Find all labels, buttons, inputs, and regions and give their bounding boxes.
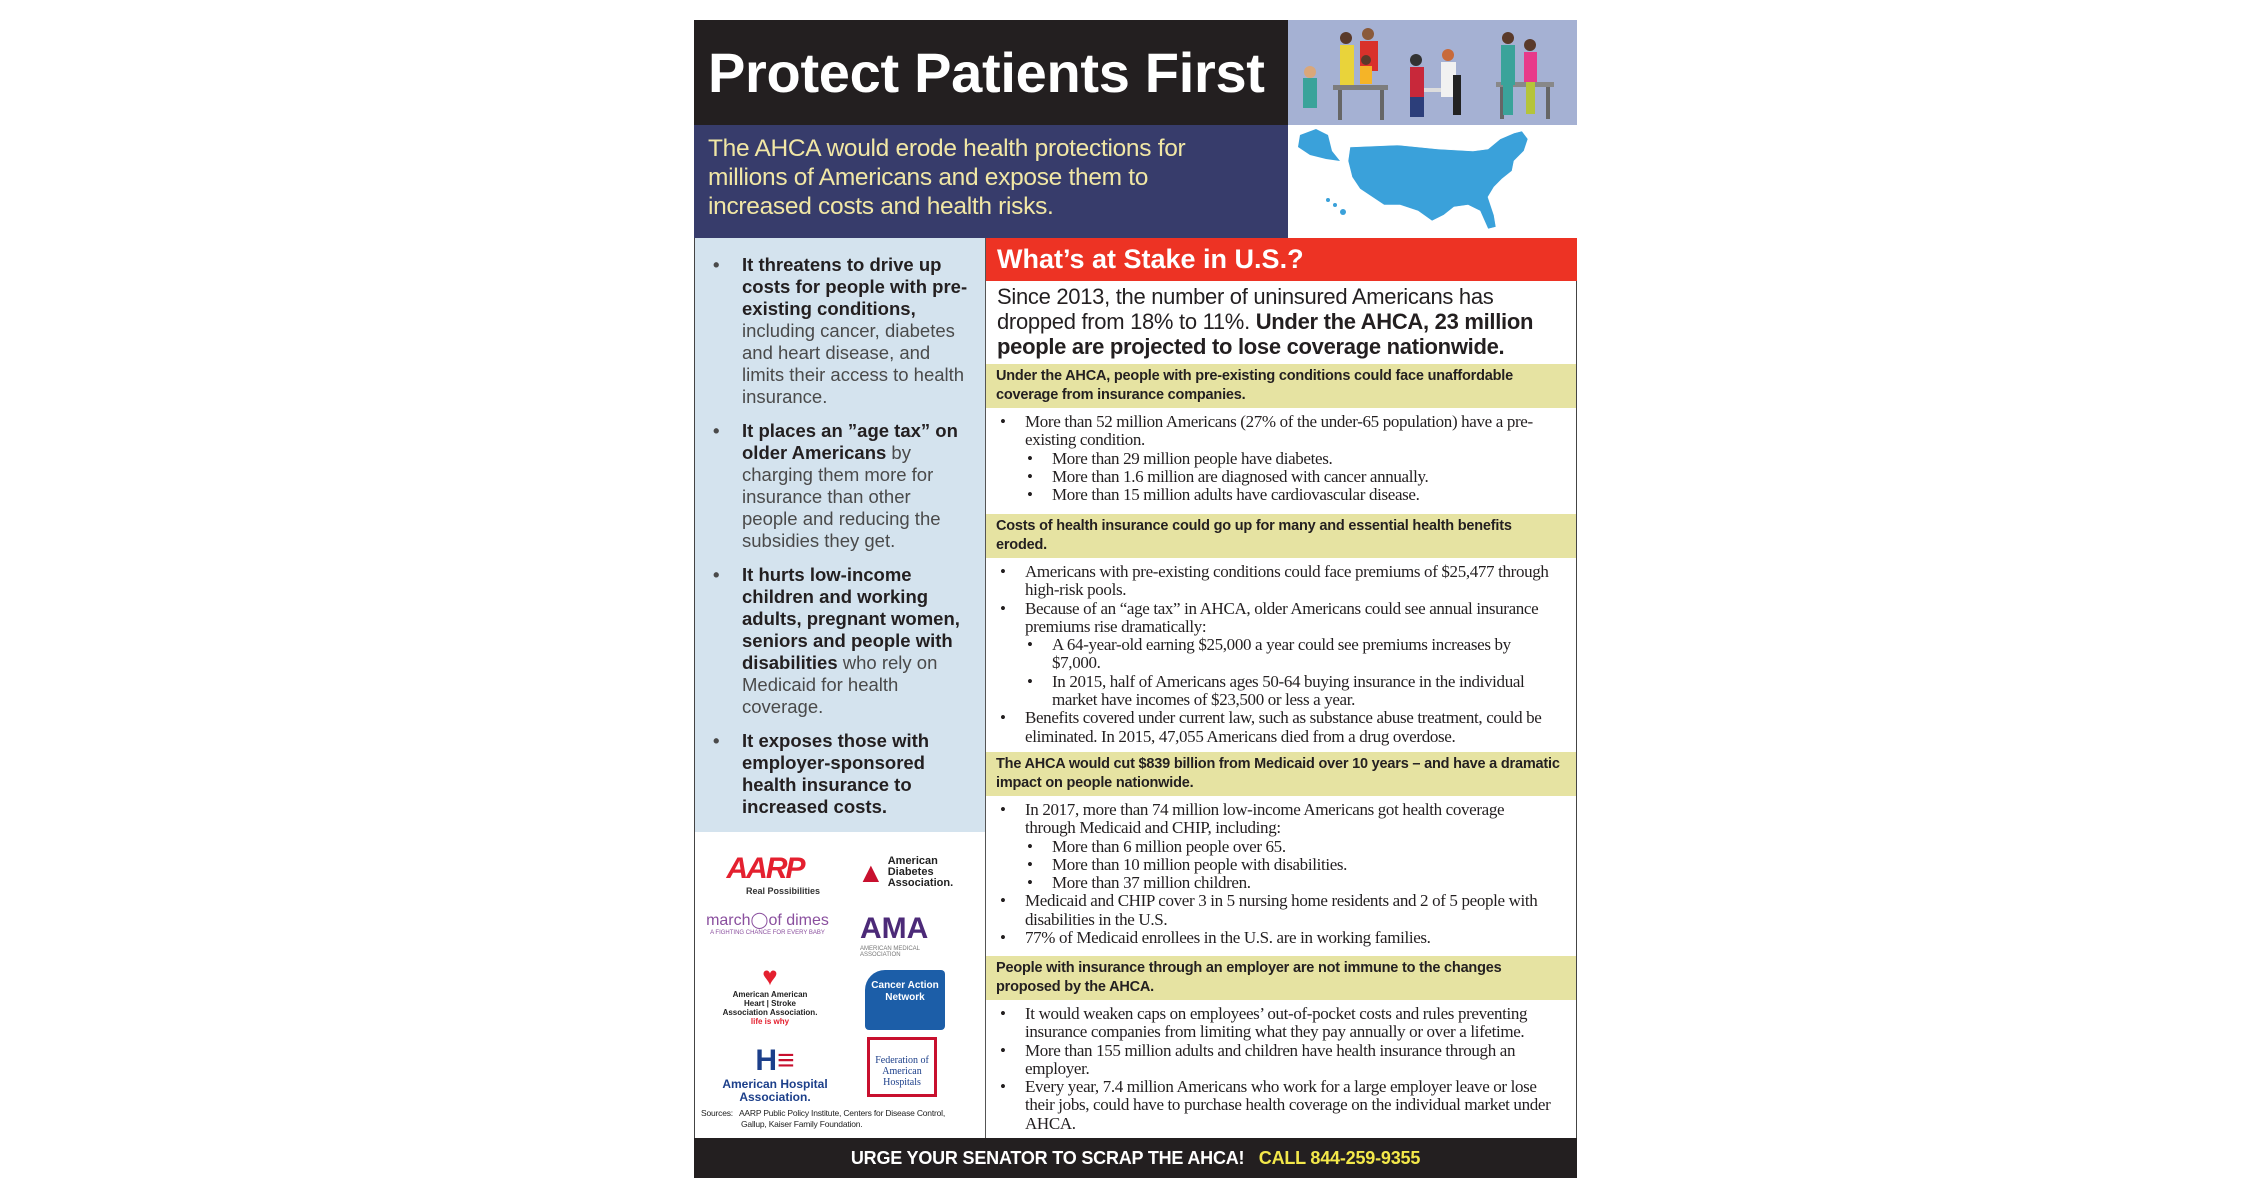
section 4: employer insurance: People with insurance through an employer are not immune to the changes proposed by the AHCA.: [996, 960, 1501, 995]
section 1: pre-existing conditions: More than 29 million people have diabetes.: [1052, 449, 1332, 468]
sources: [701, 1108, 945, 1129]
section 3: Medicaid: [986, 752, 1576, 947]
logo: AMA: AMERICAN MEDICAL ASSOCIATION: [860, 946, 920, 958]
section 3: Medicaid: In 2017, more than 74 million low-income Americans got health coverage through Medicaid and CHIP, including:: [1025, 800, 1504, 837]
section 4: employer insurance: It would weaken caps on employees’ out-of-pocket costs and rules preventing insurance companies from limiting what they pay annually or over a lifetime.: [1025, 1004, 1527, 1041]
logo: Federation of American Hospitals: Hospitals: [883, 1077, 921, 1088]
logo: Federation of American Hospitals: American: [882, 1066, 922, 1077]
logo: American Heart / Stroke Association: Association Association.: [723, 1008, 817, 1017]
map of U.S.: [1288, 125, 1577, 238]
logo: Cancer Action Network: Network: [885, 992, 925, 1003]
section 3: Medicaid: The AHCA would cut $839 billion from Medicaid over 10 years – and have a dramatic impact on people nationwide.: [996, 756, 1560, 791]
sources: Gallup, Kaiser Family Foundation.: [741, 1119, 862, 1129]
logo: Cancer Action Network: Cancer Action: [871, 980, 939, 991]
logo: American Diabetes Association: Association.: [888, 877, 953, 889]
logo: American Diabetes Association: Diabetes: [888, 866, 934, 878]
left panel: key harms: It hurts low-income children and working adults, pregnant women, seniors and people with disabilities who rely on Medicaid for health coverage.: [742, 564, 960, 717]
section 1: pre-existing conditions: More than 52 million Americans (27% of the under-65 population) have a pre-existing condition.: [1025, 412, 1533, 449]
section 3: Medicaid: Medicaid and CHIP cover 3 in 5 nursing home residents and 2 of 5 people with disabilities in the U.S.: [1025, 891, 1537, 929]
logo: American Diabetes Association: ▲: [857, 857, 885, 888]
left panel: key harms: It places an ”age tax” on older Americans by charging them more for insurance than other people and reducing the subsidies they get.: [742, 420, 958, 551]
section 2: costs: Americans with pre-existing conditions could face premiums of $25,477 through high-risk pools.: [1025, 562, 1549, 599]
title band: [694, 20, 1288, 125]
title band: Protect Patients First: [708, 41, 1265, 104]
left panel: key harms: It exposes those with employer-sponsored health insurance to increased costs.: [742, 730, 929, 817]
logo: Cancer Action Network: [865, 970, 945, 1030]
section 2: costs: A 64-year-old earning $25,000 a year could see premiums increases by $7,000.: [1052, 635, 1511, 672]
logo: American Hospital Association: American Hospital: [722, 1077, 828, 1091]
logo: AARP: Real Possibilities: [746, 886, 820, 896]
section 1: pre-existing conditions: More than 1.6 million are diagnosed with cancer annually.: [1052, 467, 1428, 486]
section 4: employer insurance: Every year, 7.4 million Americans who work for a large employer leave or lose their jobs, could have to purchase health coverage on the individual market under AHCA.: [1025, 1077, 1550, 1133]
intro statement: Since 2013, the number of uninsured Americans has dropped from 18% to 11%. Under the AHCA, 23 million people are projected to lose coverage nationwide.: [997, 284, 1533, 359]
section 2: costs: Benefits covered under current law, such as substance abuse treatment, could be eliminated. In 2015, 47,055 Americans died from a drug overdose.: [1025, 708, 1541, 746]
logos panel: [701, 852, 953, 1129]
logo: Federation of American Hospitals: Federation of: [875, 1055, 929, 1066]
sources: Sources: AARP Public Policy Institute, Centers for Disease Control,: [701, 1108, 945, 1118]
section 3: Medicaid: More than 37 million children.: [1052, 873, 1251, 892]
section 2: costs: In 2015, half of Americans ages 50-64 buying insurance in the individual market have incomes of $23,500 or less a year.: [1052, 672, 1524, 709]
section 4: employer insurance: More than 155 million adults and children have health insurance through an employer.: [1025, 1041, 1515, 1078]
section 3: Medicaid: More than 10 million people with disabilities.: [1052, 855, 1347, 874]
logo: American Heart / Stroke Association: American American: [733, 990, 807, 999]
logo: March of Dimes: A FIGHTING CHANCE FOR EVERY BABY: [710, 930, 825, 936]
logo: Federation of American Hospitals: [867, 1037, 937, 1097]
subtitle band: [694, 125, 1288, 238]
subtitle band: The AHCA would erode health protections for millions of Americans and expose them to increased costs and health risks.: [708, 135, 1185, 220]
section 3: Medicaid: More than 6 million people over 65.: [1052, 837, 1286, 856]
footer call to action: [694, 1138, 1577, 1178]
logo: AMA: AMA: [860, 912, 928, 945]
left panel: key harms: It threatens to drive up costs for people with pre-existing conditions, including cancer, diabetes and heart disease, and limits their access to health insurance.: [742, 254, 967, 407]
section 1: pre-existing conditions: [986, 364, 1576, 504]
logo: American Diabetes Association: American: [888, 855, 938, 867]
logo: American Heart / Stroke Association: [722, 961, 817, 1026]
logo: American Heart / Stroke Association: Heart | Stroke: [744, 999, 796, 1008]
illustration: patients and caregivers: [1288, 20, 1577, 125]
logo: AARP: AARP: [726, 852, 804, 885]
logo: AARP: [726, 852, 820, 896]
section 1: pre-existing conditions: More than 15 million adults have cardiovascular disease.: [1052, 485, 1420, 504]
section 2: costs: Because of an “age tax” in AHCA, older Americans could see annual insurance premiums rise dramatically:: [1025, 599, 1538, 636]
section 4: employer insurance: [986, 956, 1576, 1133]
column divider: [985, 238, 986, 1138]
section 3: Medicaid: 77% of Medicaid enrollees in the U.S. are in working families.: [1025, 928, 1431, 947]
poster frame: [694, 20, 1577, 1178]
section 1: pre-existing conditions: Under the AHCA, people with pre-existing conditions could face unaffordable coverage from insurance companies.: [996, 368, 1513, 403]
logo: American Hospital Association: [722, 1044, 828, 1104]
section 2: costs: [986, 514, 1576, 746]
left panel: key harms: [695, 238, 985, 832]
logo: American Hospital Association: Association.: [739, 1090, 811, 1104]
logo: American Hospital Association: H≡: [755, 1044, 795, 1077]
footer call to action: URGE YOUR SENATOR TO SCRAP THE AHCA! CALL 844-259-9355: [851, 1148, 1420, 1168]
logo: American Heart / Stroke Association: ♥: [762, 961, 778, 991]
section 2: costs: Costs of health insurance could go up for many and essential health benefits eroded.: [996, 518, 1512, 553]
right panel header: [985, 238, 1577, 281]
logo: March of Dimes: march◯of dimes: [706, 912, 829, 929]
logo: American Diabetes Association: [857, 855, 953, 889]
right panel header: What’s at Stake in U.S.?: [997, 244, 1304, 274]
logo: American Heart / Stroke Association: life is why: [751, 1017, 789, 1026]
